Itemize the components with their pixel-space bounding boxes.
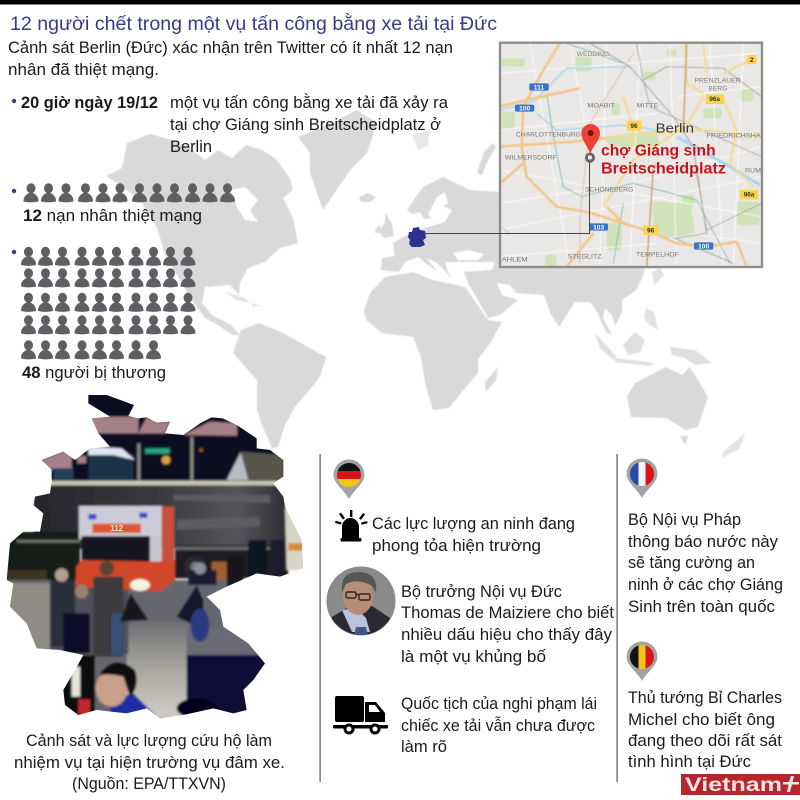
text: interior minister: là một vụ khủng bố bbox=[401, 647, 547, 666]
title: 12 người chết trong một vụ tấn công bằng xe tải tại Đức bbox=[10, 12, 497, 35]
photo in Germany shape bbox=[6, 395, 304, 718]
road shields: 96 bbox=[647, 227, 655, 234]
road shields: 111 bbox=[534, 84, 544, 91]
pin: France flag bbox=[626, 458, 658, 498]
map frame bbox=[500, 43, 762, 267]
road shields: 96a bbox=[709, 96, 720, 103]
connector line from Germany to Berlin map bbox=[425, 162, 590, 234]
text: Belgium statement: tình hình tại Đức bbox=[628, 752, 751, 771]
text: security forces: phong tỏa hiện trường bbox=[372, 536, 541, 555]
label: 48 injured: 48 người bị thương bbox=[22, 363, 166, 382]
place names: RUM bbox=[745, 168, 761, 175]
world map background bbox=[106, 110, 745, 458]
label: 12 dead: 12 nạn nhân thiệt mạng bbox=[23, 206, 202, 225]
place names: WILMERSDORF bbox=[505, 154, 557, 161]
place names bbox=[502, 51, 762, 264]
pin: Germany flag bbox=[334, 460, 364, 499]
map base layers bbox=[500, 43, 762, 267]
road shields: 103 bbox=[593, 224, 605, 231]
text: suspect nationality: làm rõ bbox=[401, 737, 447, 756]
place names: Berlin bbox=[656, 121, 694, 136]
intro text bbox=[8, 38, 453, 79]
road shields: 96a bbox=[744, 192, 755, 199]
intro text: nhân đã thiệt mạng. bbox=[8, 60, 159, 79]
pin: Belgium flag bbox=[626, 642, 658, 681]
text: interior minister: Bộ trưởng Nội vụ Đức bbox=[401, 582, 562, 601]
text: suspect nationality bbox=[401, 694, 597, 756]
road shields bbox=[515, 55, 758, 250]
Germany highlighted on world map bbox=[408, 227, 426, 247]
panel: Berlin map bbox=[500, 43, 762, 267]
top black bar bbox=[0, 0, 800, 4]
road shields: 96 bbox=[630, 123, 638, 130]
text: interior minister: Thomas de Maiziere cho biết bbox=[401, 603, 614, 622]
map callout: market name: chợ Giáng sinh bbox=[601, 143, 716, 160]
place names: STEGLITZ bbox=[568, 254, 602, 261]
text: interior minister bbox=[401, 582, 614, 666]
photo caption: nhiệm vụ tại hiện trường vụ đâm xe. bbox=[14, 753, 285, 772]
text: France statement: Bộ Nội vụ Pháp bbox=[628, 510, 741, 529]
photo caption: (Nguồn: EPA/TTXVN) bbox=[72, 774, 226, 793]
road shields: 100 bbox=[698, 243, 710, 250]
place names: AHLEM bbox=[502, 257, 528, 264]
text: Belgium statement bbox=[628, 688, 782, 771]
text: security forces bbox=[372, 514, 575, 555]
photo caption: Cảnh sát và lực lượng cứu hộ làm bbox=[26, 731, 272, 750]
map callout: market name bbox=[601, 143, 726, 178]
intro text: Cảnh sát Berlin (Đức) xác nhận trên Twitter có ít nhất 12 nạn bbox=[8, 38, 453, 57]
road shields: 2 bbox=[750, 57, 754, 64]
icon row: 12 dead bbox=[12, 183, 235, 202]
photo caption bbox=[14, 731, 285, 793]
place names: WEDDING bbox=[577, 51, 609, 58]
text: interior minister: nhiều dấu hiệu cho thấy đây bbox=[401, 625, 612, 644]
text: Belgium statement: Thủ tướng Bỉ Charles bbox=[628, 688, 782, 707]
text: France statement: Sinh trên toàn quốc bbox=[628, 597, 775, 616]
place names: MOABIT bbox=[587, 103, 615, 110]
text: France statement: ninh ở các chợ Giáng bbox=[628, 575, 783, 594]
place names: TEMPELHOF bbox=[636, 252, 679, 259]
text: France statement: thông báo nước này bbox=[628, 532, 778, 551]
place names: BERG bbox=[708, 86, 727, 93]
place names: PRENZLAUER bbox=[694, 77, 741, 84]
icon: alarm light bbox=[335, 510, 368, 542]
icon: truck bbox=[333, 696, 388, 734]
text: Belgium statement: đang theo dõi rất sát bbox=[628, 731, 782, 750]
text: France statement: sẽ tăng cường an bbox=[628, 553, 755, 572]
text: suspect nationality: chiếc xe tải vẫn chưa được bbox=[401, 716, 595, 735]
portrait: Thomas de Maiziere bbox=[326, 566, 396, 640]
text: France statement bbox=[628, 510, 783, 616]
map callout: market name: Breitscheidplatz bbox=[601, 161, 726, 178]
text: security forces: Các lực lượng an ninh đang bbox=[372, 514, 575, 533]
logo: Vietnam+ bbox=[681, 774, 800, 796]
time and place bullet: một vụ tấn công bằng xe tải đã xảy ra bbox=[170, 93, 449, 112]
text: suspect nationality: Quốc tịch của nghi phạm lái bbox=[401, 694, 597, 713]
place names: SCHÖNEBERG bbox=[585, 186, 633, 194]
time and place bullet: Berlin bbox=[170, 137, 212, 156]
ambulance number: 112 bbox=[110, 524, 124, 533]
icon grid: 48 injured bbox=[12, 247, 195, 359]
time and place bullet: 20 giờ ngày 19/12 bbox=[21, 93, 158, 112]
logo: Vietnam+: Vietnam bbox=[685, 775, 782, 796]
location pin bbox=[581, 124, 600, 163]
time and place bullet: tại chợ Giáng sinh Breitscheidplatz ở bbox=[170, 115, 441, 134]
road shields: 100 bbox=[519, 105, 531, 112]
place names: FRIEDRICHSHA bbox=[707, 132, 762, 139]
text: Belgium statement: Michel cho biết ông bbox=[628, 710, 775, 729]
place names: CHARLOTTENBURG bbox=[516, 132, 581, 139]
time and place bullet bbox=[12, 93, 449, 156]
place names: MITTE bbox=[637, 103, 658, 110]
